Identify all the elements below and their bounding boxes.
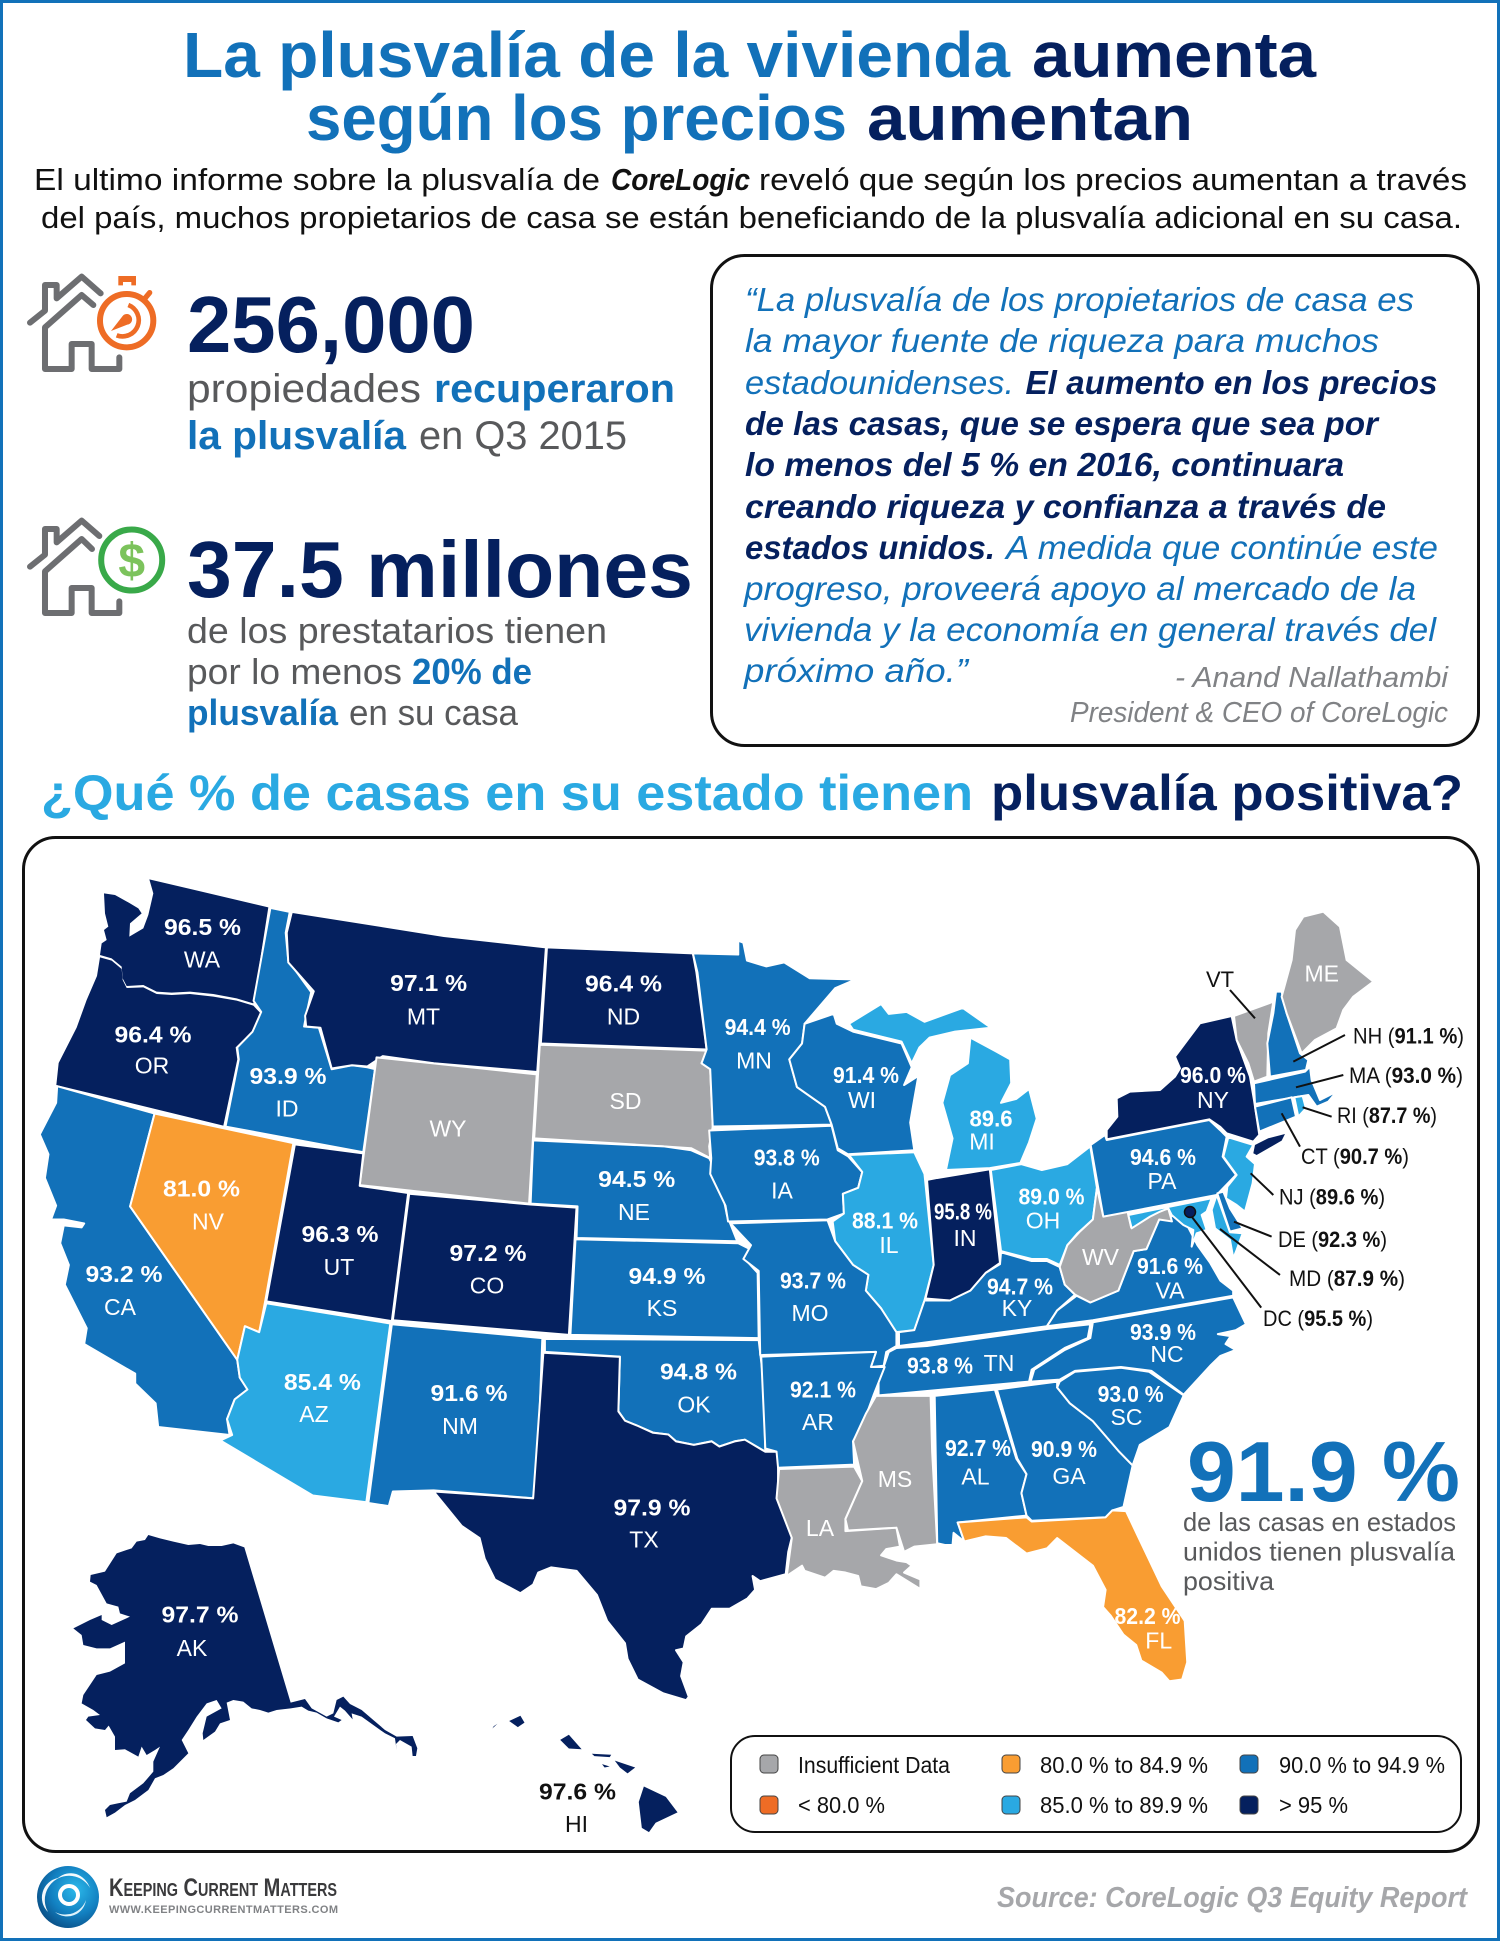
state: South Carolina [1057,1368,1184,1465]
icon: house with stopwatch [30,276,153,369]
state: Nebraska: NE [618,1199,650,1225]
state: West Virginia: WV [1082,1244,1120,1270]
state: Texas: 97.9 % [614,1495,690,1521]
northeast callouts: NH (91.1 %) [1353,1024,1464,1048]
state: Indiana: 95.8 % [934,1198,992,1224]
state: Minnesota: 94.4 % [725,1014,791,1040]
state: Texas [434,1353,793,1700]
state: Arizona: AZ [299,1401,329,1427]
state: Nebraska [531,1140,737,1241]
state: Arkansas [761,1352,885,1468]
stat: 37.5 millones: 37.5 millones [187,525,693,614]
state: Virginia: VA [1156,1278,1185,1304]
state: South Carolina: 93.0 % [1098,1381,1164,1407]
state: Michigan: 89.6 [970,1106,1012,1132]
northeast callouts: MD (87.9 %) [1289,1266,1405,1291]
state: Missouri: 93.7 % [780,1268,846,1294]
state: Vermont [1234,1002,1273,1082]
intro paragraph [34,162,1467,235]
state: Virginia: 91.6 % [1137,1253,1203,1279]
state: New Mexico: 91.6 % [430,1380,508,1406]
stat: 256,000 properties [187,280,675,458]
state: Minnesota [693,941,856,1127]
panel: quote: lo menos del 5 % en 2016, continuara [745,446,1344,483]
state: Utah: UT [324,1254,354,1280]
state: Kansas [570,1239,759,1338]
state: Nevada: 81.0 % [163,1176,240,1202]
state: Oklahoma [545,1339,765,1452]
state: Tennessee: 93.8 % [907,1353,973,1379]
heading: map question [41,765,1463,821]
stat: 256,000 properties: recuperaron [434,367,675,411]
state: Washington [100,879,268,1003]
state: Arizona: 85.4 % [284,1369,361,1395]
legend: 90.0 % to 94.9 % [1279,1752,1445,1778]
state: North Dakota: 96.4 % [585,971,662,997]
state: North Carolina [1031,1297,1246,1395]
state: Rhode Island [1294,1096,1306,1117]
title [183,19,1316,154]
state: Pennsylvania: PA [1148,1168,1177,1194]
state: Florida [958,1510,1187,1681]
state: Maine [1282,912,1373,1053]
intro paragraph: El ultimo informe sobre la plusvalía de [34,162,600,197]
legend: 85.0 % to 89.9 % [1040,1792,1208,1818]
state: Indiana [926,1169,1000,1301]
state: Ohio [991,1146,1097,1265]
state: Nevada [130,1114,293,1360]
state: Alaska [73,1535,417,1817]
state: California: 93.2 % [86,1261,162,1287]
state: New Mexico [368,1324,542,1506]
state: California [40,1086,247,1435]
state: Tennessee: TN [984,1350,1014,1376]
stat: 37.5 millones: en su casa [349,692,519,733]
state: Illinois [833,1152,934,1332]
northeast callouts: VT [1206,967,1234,992]
state: Oregon [56,957,261,1126]
state: Michigan [849,1004,1037,1170]
panel: quote: vivienda y la economía en general través del [744,611,1438,648]
panel: quote: creando riqueza y confianza a través de [745,488,1386,525]
state: Louisiana [777,1467,920,1589]
panel: quote: - Anand Nallathambi [1175,662,1450,694]
stat: 37.5 millones: plusvalía [187,692,339,733]
state: Idaho: ID [276,1096,298,1122]
state: Montana [287,912,546,1072]
northeast callouts: MA (93.0 %) [1349,1063,1463,1088]
panel: quote: la mayor fuente de riqueza para muchos [745,322,1379,359]
callout: national figure: unidos tienen plusvalía [1183,1536,1456,1566]
state: Georgia: 90.9 % [1031,1436,1097,1462]
state: Colorado [393,1194,577,1335]
state: Nevada: NV [192,1208,225,1234]
state: Washington: 96.5 % [164,914,241,940]
state: North Dakota: ND [607,1004,640,1030]
state: Alaska: AK [177,1635,208,1661]
state: Missouri: MO [791,1300,829,1326]
state: Michigan: MI [969,1128,995,1154]
state: Connecticut [1255,1097,1296,1132]
stat: 37.5 millones [187,525,693,733]
logo: Keeping Current Matters: WWW.KEEPINGCURRENTMATTERS.COM [109,1904,338,1916]
state: Indiana: IN [954,1225,976,1251]
state: Alabama: 92.7 % [945,1435,1011,1461]
title: La plusvalía de la vivienda [183,19,1010,91]
stat: 256,000 properties: propiedades [187,367,421,411]
legend: 80.0 % to 84.9 % [1040,1752,1208,1778]
state: Oregon: 96.4 % [114,1022,192,1048]
state: Missouri [731,1220,896,1367]
state: Mississippi: MS [878,1466,912,1492]
state: Alabama [935,1390,1027,1545]
state: Arkansas: 92.1 % [790,1376,856,1402]
state: Oregon: OR [135,1053,169,1079]
northeast callouts [1184,967,1464,1331]
state: Ohio: OH [1026,1208,1060,1234]
state map [40,879,1373,1837]
state: Mississippi [845,1396,937,1552]
northeast callouts: DC (95.5 %) [1263,1306,1373,1331]
stat: 256,000 properties: 256,000 [187,280,475,369]
state: New Mexico: NM [442,1413,478,1439]
state: Maryland [1128,1195,1243,1258]
state: Minnesota: MN [736,1047,772,1073]
state: South Dakota [534,1045,713,1158]
state: Arizona [220,1303,390,1502]
callout: national figure: 91.9 % [1187,1425,1460,1520]
stat: 37.5 millones: 20% de [412,651,532,692]
state: Virginia [1047,1216,1233,1326]
panel: quote: “La plusvalía de los propietarios de casa es [745,281,1414,318]
state: Montana: MT [407,1004,440,1030]
state: Florida: 82.2 % [1114,1603,1180,1629]
state: New Hampshire [1267,992,1308,1077]
state: Kentucky: KY [1002,1295,1032,1321]
state: Nebraska: 94.5 % [598,1166,675,1192]
callout: national figure: positiva [1183,1566,1275,1596]
state: Kentucky [899,1252,1075,1346]
legend: < 80.0 % [798,1792,885,1818]
state: Hawaii [492,1716,678,1837]
state: Georgia: GA [1052,1463,1086,1489]
state: Oklahoma: 94.8 % [660,1359,737,1385]
state: New Jersey [1223,1137,1255,1212]
northeast callouts: CT (90.7 %) [1301,1144,1409,1169]
state: Florida: FL [1145,1628,1172,1654]
northeast callouts: NJ (89.6 %) [1279,1184,1385,1210]
state: Massachusetts [1254,1067,1337,1107]
state: Wisconsin: WI [848,1087,876,1113]
state: New York [1107,1016,1285,1155]
state: West Virginia [1060,1188,1172,1303]
state: Colorado: 97.2 % [450,1240,526,1266]
state: Kansas: 94.9 % [628,1263,706,1289]
state: Iowa: 93.8 % [754,1145,820,1171]
state: Colorado: CO [470,1272,504,1298]
state: New York: NY [1197,1087,1229,1113]
state: Delaware [1217,1192,1243,1232]
state: Wyoming [360,1057,537,1204]
stat: 256,000 properties: la plusvalía [187,414,407,458]
northeast callouts: DE (92.3 %) [1278,1227,1387,1252]
logo: Keeping Current Matters: Keeping Current Matters [109,1874,337,1902]
panel: quote: estadounidenses. [745,364,1014,401]
panel: quote: El aumento en los precios [1026,364,1438,401]
panel: quote: progreso, proveerá apoyo al mercado de la [743,570,1416,607]
logo: Keeping Current Matters [37,1866,338,1928]
stat: 256,000 properties: en Q3 2015 [419,414,627,458]
state: Idaho: 93.9 % [250,1063,326,1089]
icon: house with dollar coin: $ [118,535,145,588]
panel: quote: estados unidos. [745,529,995,566]
northeast callouts: RI (87.7 %) [1337,1103,1437,1128]
state: Tennessee [879,1324,1090,1395]
state: Pennsylvania: 94.6 % [1130,1144,1196,1170]
state: Illinois: IL [879,1232,899,1258]
intro paragraph: del país, muchos propietarios de casa se están beneficiando de la plusvalía adicional en su casa. [41,200,1462,235]
panel: quote [712,256,1478,746]
state: South Carolina: SC [1111,1404,1142,1430]
state: Utah: 96.3 % [302,1221,378,1247]
state: Georgia [997,1382,1133,1521]
legend: > 95 % [1279,1792,1348,1818]
source note: Source: CoreLogic Q3 Equity Report [997,1882,1468,1914]
state: North Dakota [541,947,707,1049]
icon: house with dollar coin [30,521,162,613]
state: Montana: 97.1 % [390,970,467,996]
state: Hawaii: HI [565,1811,588,1837]
state: New York: 96.0 % [1180,1062,1246,1088]
legend [731,1736,1461,1832]
heading: map question: ¿Qué % de casas en su estado tienen [41,765,973,821]
state: Oklahoma: OK [677,1392,711,1418]
state: North Carolina: NC [1150,1341,1184,1367]
state: Washington: WA [184,947,221,973]
callout: national figure [1183,1425,1460,1596]
state: Wisconsin: 91.4 % [833,1062,899,1088]
state: Ohio: 89.0 % [1018,1184,1084,1210]
stat: 37.5 millones: por lo menos [187,651,402,692]
panel: quote: President & CEO of CoreLogic [1070,697,1448,729]
state: South Dakota: SD [610,1088,641,1114]
stat: 37.5 millones: de los prestatarios tienen [187,610,607,651]
state: North Carolina: 93.9 % [1130,1319,1196,1345]
panel: quote: de las casas, que se espera que sea por [745,405,1380,442]
state: Pennsylvania [1091,1120,1236,1217]
state: Maine: ME [1304,961,1339,987]
state: Hawaii: 97.6 % [539,1779,616,1805]
legend: Insufficient Data [798,1752,950,1778]
intro paragraph: CoreLogic [611,162,750,197]
state: Alaska: 97.7 % [162,1602,238,1628]
heading: map question: plusvalía positiva? [991,765,1463,821]
state: Arkansas: AR [802,1409,834,1435]
state: Wisconsin [789,1014,918,1154]
state: California: CA [104,1294,137,1320]
panel: quote: A medida que continúe este [1004,529,1438,566]
intro paragraph: reveló que según los precios aumentan a través [759,162,1467,197]
state: Iowa: IA [771,1178,794,1204]
state: Idaho [226,908,375,1152]
callout: national figure: de las casas en estados [1183,1507,1456,1537]
title: aumenta [1032,19,1316,91]
state: Wyoming: WY [429,1115,467,1141]
title: aumentan [867,82,1193,154]
state: Illinois: 88.1 % [852,1208,918,1234]
title: según los precios [306,82,847,154]
state: Utah [266,1144,408,1321]
state: Kansas: KS [647,1295,677,1321]
state: Iowa [709,1126,862,1221]
state: Louisiana: LA [806,1515,835,1541]
state: Kentucky: 94.7 % [987,1274,1053,1300]
state: Alabama: AL [961,1464,990,1490]
state: Texas: TX [629,1527,659,1553]
panel: map [24,838,1478,1852]
panel: quote: próximo año.” [743,652,970,689]
